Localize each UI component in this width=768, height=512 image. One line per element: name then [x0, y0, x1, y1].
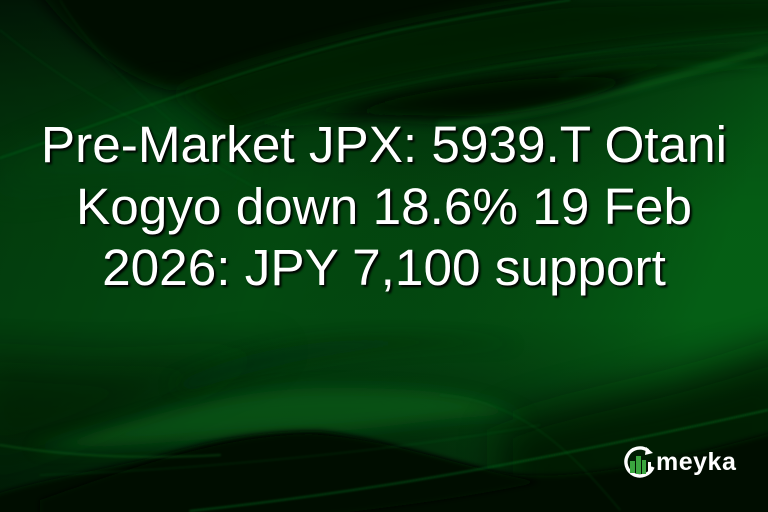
- bright band left of lens: [0, 92, 240, 190]
- bottom dark mound: [0, 425, 768, 512]
- upper faint dark wave: [170, 338, 520, 392]
- bottom right dark fade: [500, 340, 768, 512]
- title: Pre-Market JPX: 5939.T Otani: [41, 116, 727, 173]
- title: Kogyo down 18.6% 19 Feb: [76, 178, 692, 234]
- dark lens upper centre: [225, 48, 768, 134]
- icon: circular arrow with bars: [624, 446, 654, 478]
- logo wordmark: meyka: [656, 448, 736, 476]
- lower-left dark fade: [0, 345, 290, 465]
- bright band above the mound: [30, 388, 530, 448]
- dark top area: [30, 0, 570, 92]
- logo: meyka: [624, 446, 736, 478]
- title: 2026: JPY 7,100 support: [102, 239, 666, 296]
- title: [41, 116, 727, 299]
